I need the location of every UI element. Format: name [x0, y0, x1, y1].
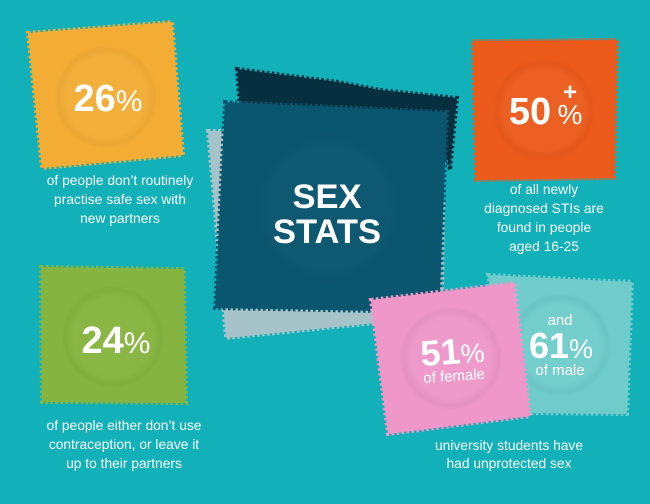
stat: and 61% of male: 61% — [529, 325, 593, 366]
panel: sachet 61% — [488, 275, 632, 414]
stat: and 61% of male: and — [547, 312, 573, 329]
text: 26% caption: new partners — [80, 211, 160, 226]
stat: 51% of female: 51% — [419, 329, 486, 374]
stat: and 61% of male — [529, 312, 593, 379]
text: students caption: had unprotected sex — [446, 456, 572, 471]
stat: 50+%: + — [563, 79, 577, 106]
stat: 26%: 26% — [74, 78, 142, 120]
panel: sachet 50%+ — [473, 40, 617, 180]
text: 50% caption: found in people — [497, 220, 592, 235]
text: 50% caption — [484, 182, 604, 254]
panel: centre sachet stack — [208, 69, 457, 338]
text: 24% caption — [47, 418, 202, 471]
stat: 24%: 24% — [82, 320, 150, 362]
text: 24% caption: contraception, or leave it — [49, 437, 199, 452]
stat: and 61% of male: of male — [535, 362, 585, 379]
text: 26% caption — [47, 173, 193, 226]
stat: 50+%: 50 — [509, 91, 551, 133]
text: 26% caption: of people don’t routinely — [47, 173, 193, 188]
text: 50% caption: aged 16-25 — [509, 239, 579, 254]
panel: sachet 24% — [41, 267, 186, 403]
text: 50% caption: of all newly — [510, 182, 578, 197]
panel: sachet 26% — [28, 22, 183, 168]
title: SEX — [292, 178, 362, 216]
text: students caption: university students have — [435, 438, 583, 453]
sachet: pale back layer — [208, 131, 443, 338]
title: STATS — [273, 213, 381, 251]
sachet: dark back layer — [237, 69, 457, 170]
stat: 50+% — [509, 79, 582, 133]
stat: 51% of female: of female — [423, 366, 486, 387]
text: 24% caption: of people either don’t use — [47, 418, 202, 433]
text: 24% caption: up to their partners — [66, 456, 182, 471]
panel: sachet 51% — [371, 283, 530, 434]
sachet: front — [215, 102, 447, 312]
text: 50% caption: diagnosed STIs are — [484, 201, 604, 216]
text: 26% caption: practise safe sex with — [54, 192, 186, 207]
stat: 50+%: % — [558, 99, 582, 130]
text: students caption — [435, 438, 583, 471]
